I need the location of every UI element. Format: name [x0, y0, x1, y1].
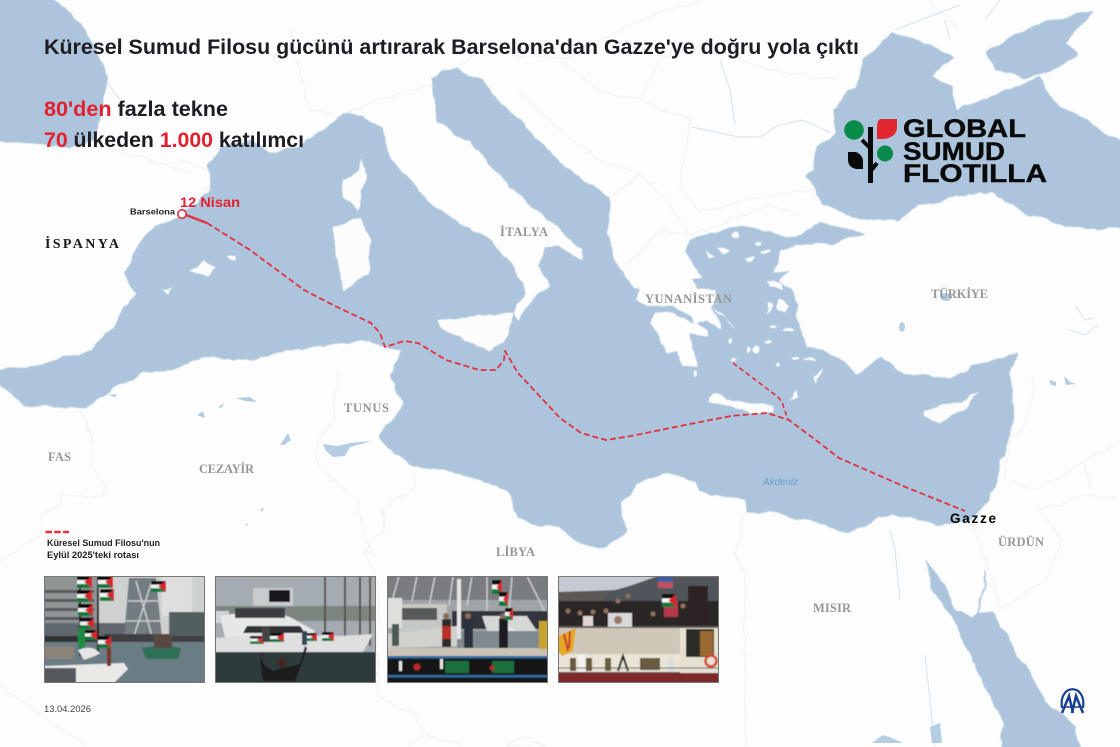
icon: Anadolu Agency logo	[1062, 689, 1083, 713]
legend	[46, 532, 160, 560]
country labels: FAS	[48, 450, 71, 464]
logo wordmark: GLOBAL	[903, 115, 1026, 143]
route: flotilla dashed path	[186, 215, 965, 511]
photo 1: harbour boats with flags	[44, 576, 205, 683]
islands	[162, 160, 980, 423]
logo icon: tree	[844, 119, 897, 183]
logo: Global Sumud Flotilla	[844, 115, 1047, 188]
solid start of route	[186, 215, 207, 223]
country labels: İTALYA	[500, 225, 548, 239]
legend text: Eylül 2025'teki rotası	[47, 550, 139, 560]
title: Küresel Sumud Filosu gücünü artırarak Barselona'dan Gazze'ye doğru yola çıktı	[44, 36, 859, 59]
marker: Barcelona start	[130, 206, 186, 218]
mediterranean sea	[0, 67, 1017, 548]
country labels: CEZAYİR	[199, 462, 255, 476]
logo wordmark	[903, 115, 1047, 188]
label: Gazze: Gazze	[950, 511, 996, 526]
dashed main route	[207, 223, 965, 511]
label: Akdeniz: Akdeniz	[762, 477, 798, 488]
sea of azov	[987, 12, 1094, 77]
country labels: TÜRKİYE	[931, 287, 988, 301]
photo 4: crowd on a houseboat	[558, 576, 719, 683]
logo wordmark: SUMUD	[903, 138, 1005, 166]
country labels: YUNANİSTAN	[645, 292, 732, 306]
country labels	[45, 225, 1044, 615]
atlantic	[0, 0, 107, 148]
photo 3: crew on a dark boat	[387, 576, 548, 683]
country labels: İSPANYA	[45, 235, 120, 252]
legend text: Küresel Sumud Filosu'nun	[47, 538, 160, 548]
dashed branch from Greece	[733, 363, 788, 420]
label: Barselona: Barselona	[130, 206, 175, 216]
red sea	[926, 560, 1085, 747]
photo 2: white motor yacht and person	[215, 576, 376, 683]
subtitle: boats: 80'den fazla tekne	[44, 98, 228, 121]
black sea	[806, 33, 1120, 227]
country labels: ÜRDÜN	[998, 535, 1044, 549]
logo wordmark: FLOTILLA	[903, 160, 1047, 188]
country labels: TUNUS	[344, 401, 389, 415]
subtitle: participants: 70 ülkeden 1.000 katılımcı	[44, 129, 304, 152]
country labels: LİBYA	[496, 545, 535, 559]
country labels: MISIR	[813, 601, 852, 615]
label: 12 Nisan: 12 Nisan	[180, 194, 240, 210]
legend swatch: dashed line	[46, 531, 69, 533]
date: 13.04.2026	[44, 704, 91, 715]
